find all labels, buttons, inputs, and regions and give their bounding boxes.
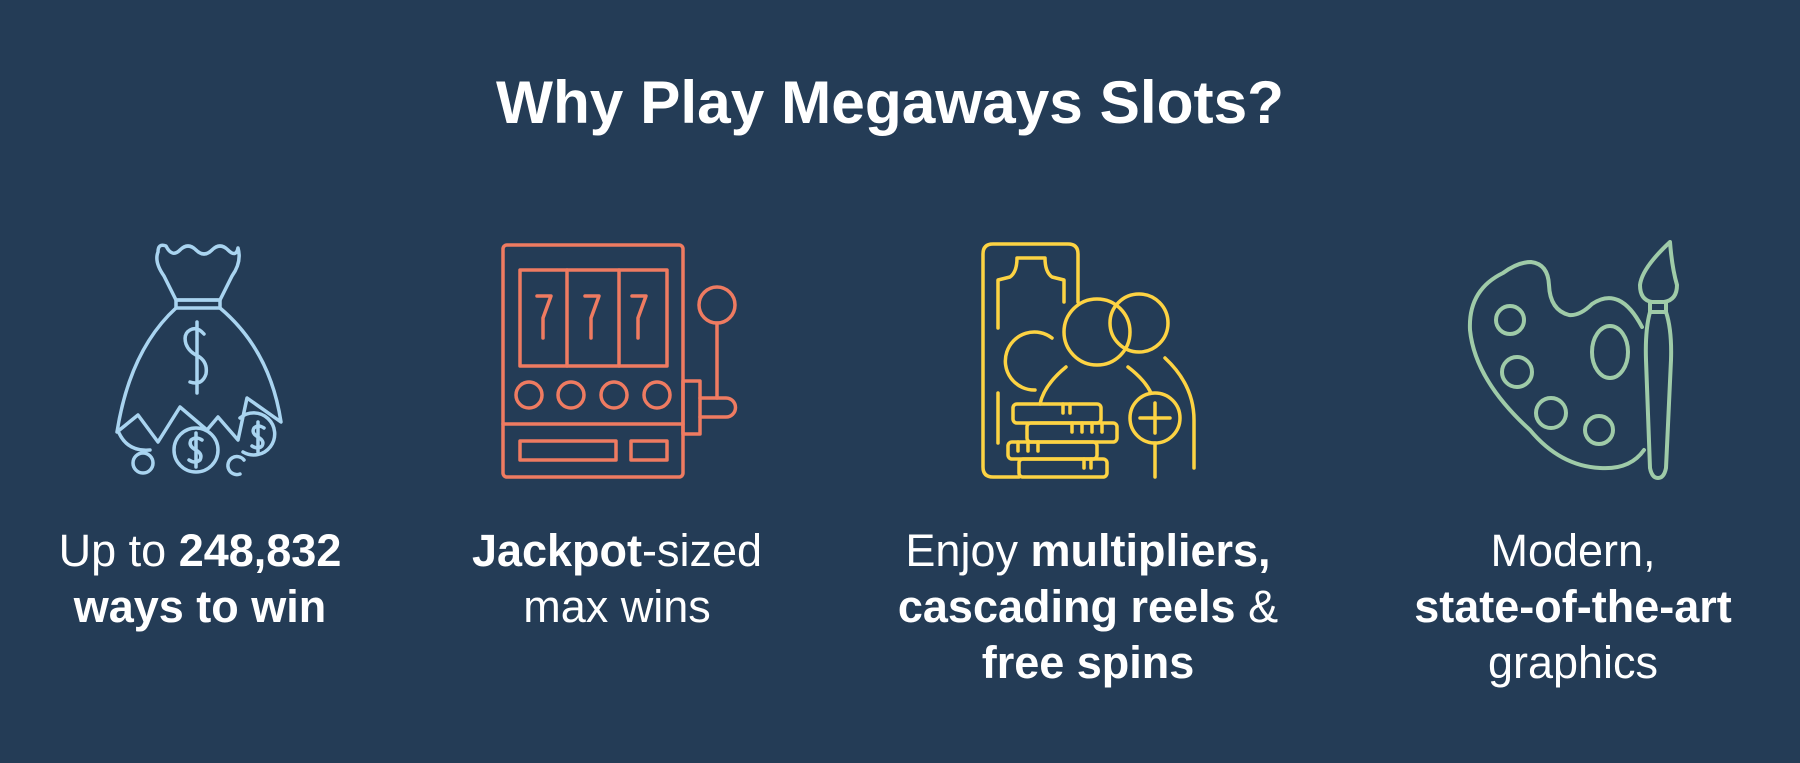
- text: col 4: state-of-the-art: [1414, 581, 1732, 632]
- text: col 3: Enjoy multipliers,: [905, 525, 1271, 576]
- icon: paint palette: [1470, 242, 1677, 478]
- text: col 3: free spins: [982, 637, 1194, 688]
- text: col 1: ways to win: [73, 581, 326, 632]
- icon: money bag: [117, 245, 281, 475]
- text: col 4: graphics: [1488, 637, 1658, 688]
- text: col 3: &: [1236, 581, 1278, 632]
- icon: coins and phone: [983, 244, 1194, 477]
- text: col 1: Up to 248,832: [59, 525, 341, 576]
- icon: slot machine: [503, 245, 736, 477]
- text: col 2: Jackpot-sized: [472, 525, 762, 576]
- text: col 3: cascading reels: [898, 581, 1236, 632]
- text: col 2: max wins: [523, 581, 711, 632]
- title: Why Play Megaways Slots?: [496, 69, 1284, 136]
- text: col 4: Modern,: [1490, 525, 1656, 576]
